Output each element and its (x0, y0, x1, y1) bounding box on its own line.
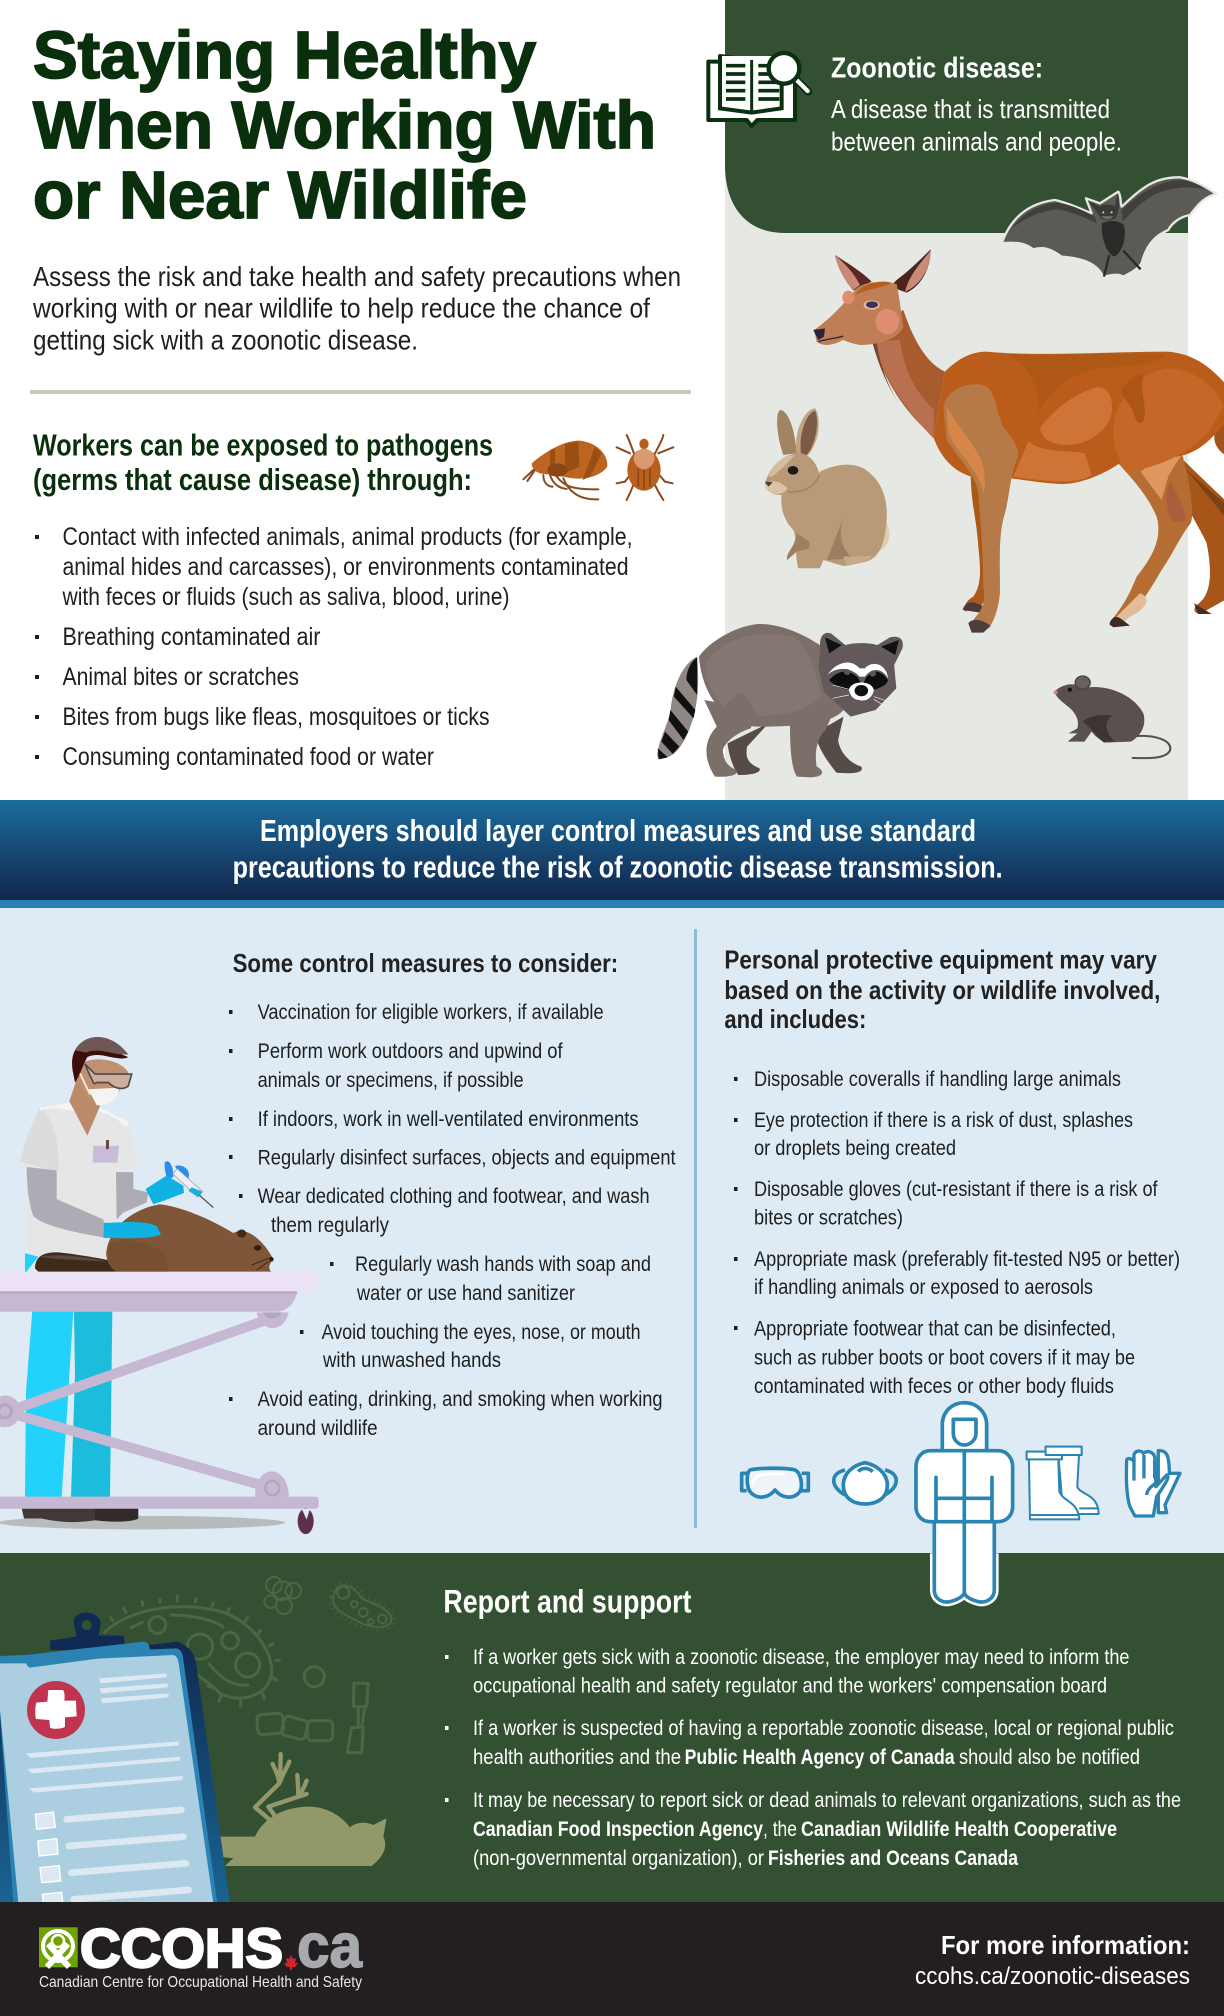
list: control measures: Regularly disinfect surfaces, objects and equipment (258, 1146, 676, 1170)
title: When Working With (33, 88, 656, 163)
beaver (35, 1252, 117, 1272)
illustration: bat (1002, 177, 1217, 277)
list: personal protective equipment: contaminated with feces or other body fluids (754, 1374, 1114, 1398)
head (814, 282, 903, 345)
list: report and support (445, 1646, 1181, 1870)
list: report and support: Canadian Food Inspection Agency (473, 1818, 763, 1841)
text: zoonotic definition: A disease that is transmitted (831, 94, 1110, 124)
heading: exposure to pathogens (33, 428, 493, 497)
list: personal protective equipment (734, 1067, 1180, 1398)
list: control measures: Regularly wash hands with soap and (355, 1252, 651, 1276)
text: introduction: working with or near wildlife to help reduce the chance of (32, 292, 650, 324)
list: personal protective equipment: such as rubber boots or boot covers if it may be (754, 1346, 1135, 1370)
list: report and support: Public Health Agency of Canada (685, 1746, 955, 1769)
list: personal protective equipment: if handling animals or exposed to aerosols (754, 1275, 1093, 1299)
paper lines (26, 1673, 183, 1793)
text: introduction: Assess the risk and take health and safety precautions when (33, 261, 681, 292)
logo tagline: Canadian Centre for Occupational Health and Safety (39, 1974, 362, 1991)
medical cross (27, 1681, 85, 1739)
list: personal protective equipment: bites or scratches) (754, 1206, 903, 1230)
list: report and support: Canadian Wildlife Health Cooperative (801, 1818, 1117, 1841)
list: exposure routes: Animal bites or scratches (62, 663, 299, 691)
panel: zoonotic disease definition (708, 0, 1188, 233)
logo: CCOHS.ca: CCOHS (80, 1917, 283, 1979)
title (33, 18, 656, 233)
list: exposure routes: Contact with infected animals, animal products (for example, (62, 523, 632, 551)
logo: CCOHS.ca: . (288, 1954, 292, 1970)
front legs (965, 477, 992, 612)
icons: personal protective equipment (742, 1403, 1180, 1602)
list: exposure routes: Breathing contaminated air (62, 623, 320, 651)
list: exposure routes: with feces or fluids (such as saliva, blood, urine) (62, 583, 509, 611)
list: exposure routes: Bites from bugs like fleas, mosquitoes or ticks (62, 703, 490, 731)
list: report and support: should also be notified (959, 1746, 1140, 1769)
text: introduction (32, 261, 681, 356)
panel: animal column background (725, 0, 1188, 800)
illustration: worker examining beaver on table (0, 1037, 319, 1534)
paper (0, 1655, 213, 1903)
list: exposure routes (35, 523, 632, 771)
list: control measures: Avoid touching the eyes, nose, or mouth (322, 1320, 641, 1344)
illustration: microbes background (103, 1577, 395, 1753)
list: control measures (229, 1000, 676, 1440)
illustration: deer (813, 249, 1224, 633)
text: banner message (233, 813, 1003, 884)
text: more information link: For more information: (941, 1930, 1190, 1960)
list: control measures: Avoid eating, drinking, and smoking when working (258, 1387, 663, 1411)
illustration: rabbit (765, 408, 890, 568)
shoes (95, 1508, 138, 1522)
list: control measures: animals or specimens, if possible (258, 1068, 524, 1092)
text: banner message: precautions to reduce the risk of zoonotic disease transmission. (233, 850, 1003, 884)
list: personal protective equipment: Appropriate footwear that can be disinfected, (754, 1317, 1116, 1341)
heading: personal protective equipment: and includes: (724, 1004, 866, 1034)
body (933, 352, 1224, 484)
list: control measures: Perform work outdoors and upwind of (258, 1039, 563, 1063)
list: report and support: (non-governmental organization), or (473, 1847, 764, 1870)
list: control measures: with unwashed hands (322, 1348, 501, 1372)
banner: layered control measures (0, 800, 1224, 908)
title: Staying Healthy (33, 18, 536, 93)
text: banner message: Employers should layer control measures and use standard (260, 813, 976, 848)
list: control measures: them regularly (271, 1213, 389, 1237)
list: control measures: If indoors, work in well-ventilated environments (258, 1107, 639, 1131)
illustration: dead bird silhouette (218, 1754, 387, 1866)
list: report and support: If a worker gets sick with a zoonotic disease, the employer may need to inform the (473, 1646, 1130, 1669)
list: exposure routes: animal hides and carcasses), or environments contaminated (62, 553, 628, 581)
logo: CCOHS.ca: ca (297, 1912, 362, 1981)
heading: personal protective equipment (724, 945, 1160, 1034)
text: zoonotic definition: between animals and people. (831, 126, 1122, 156)
illustration: clipboard (0, 1612, 230, 1909)
torso (20, 1103, 138, 1258)
pocket (93, 1146, 119, 1163)
list: report and support: health authorities and the (473, 1746, 681, 1769)
syringe and glove (165, 1161, 189, 1179)
heading: exposure to pathogens: (germs that cause disease) through: (33, 462, 472, 497)
panel: report and support background (0, 1553, 1224, 1902)
icon: gloves (1126, 1451, 1180, 1516)
illustration: mouse (1053, 676, 1170, 758)
neck (872, 310, 945, 437)
icon: rubber boots (1027, 1447, 1099, 1519)
shadow (0, 1516, 285, 1529)
neck and head (69, 1077, 100, 1136)
icon: goggles (742, 1468, 808, 1497)
list: personal protective equipment: Disposable gloves (cut-resistant if there is a risk of (754, 1177, 1158, 1201)
list: control measures: around wildlife (258, 1416, 378, 1440)
illustration: raccoon (657, 624, 903, 777)
heading: personal protective equipment: Personal protective equipment may vary (724, 945, 1157, 975)
list: control measures: Vaccination for eligible workers, if available (258, 1000, 604, 1024)
text: zoonotic heading: Zoonotic disease: (831, 52, 1043, 84)
list: personal protective equipment: Disposable coveralls if handling large animals (754, 1067, 1121, 1091)
list: personal protective equipment: or droplets being created (754, 1136, 956, 1160)
pants (25, 1253, 38, 1274)
icon: book with magnifier (708, 53, 808, 126)
list: control measures: Wear dedicated clothing and footwear, and wash (258, 1184, 650, 1208)
list: report and support: Fisheries and Oceans Canada (768, 1847, 1018, 1870)
text: more information link: ccohs.ca/zoonotic-diseases (915, 1963, 1190, 1990)
icon: respirator mask (834, 1463, 896, 1504)
panel: footer (0, 1902, 1224, 2016)
heading: control measures: Some control measures to consider: (233, 948, 618, 978)
text: introduction: getting sick with a zoonotic disease. (33, 324, 418, 356)
list: personal protective equipment: Eye protection if there is a risk of dust, splashes (754, 1108, 1133, 1132)
text: zoonotic definition (831, 94, 1122, 156)
list: exposure routes: Consuming contaminated food or water (62, 743, 434, 771)
heading: report and support: Report and support (443, 1584, 692, 1620)
heading: personal protective equipment: based on the activity or wildlife involved, (724, 975, 1160, 1005)
panel: control measures and PPE background (0, 908, 1224, 1553)
title: or Near Wildlife (33, 158, 527, 233)
ears (835, 255, 872, 291)
icon: coverall suit (916, 1403, 1013, 1602)
text: more information link (915, 1930, 1190, 1990)
heading: exposure to pathogens: Workers can be exposed to pathogens (33, 428, 493, 462)
near hind leg (1110, 447, 1192, 625)
clip (50, 1612, 125, 1650)
list: report and support: , the (763, 1818, 797, 1841)
table (0, 1272, 318, 1291)
icon: flea and tick (523, 435, 673, 500)
list: control measures: water or use hand sanitizer (356, 1281, 575, 1305)
logo: CCOHS.ca (39, 1912, 362, 1991)
list: report and support: occupational health and safety regulator and the workers' compensation board (473, 1675, 1107, 1698)
far hind leg and tail (1177, 453, 1224, 614)
board (0, 1642, 230, 1903)
